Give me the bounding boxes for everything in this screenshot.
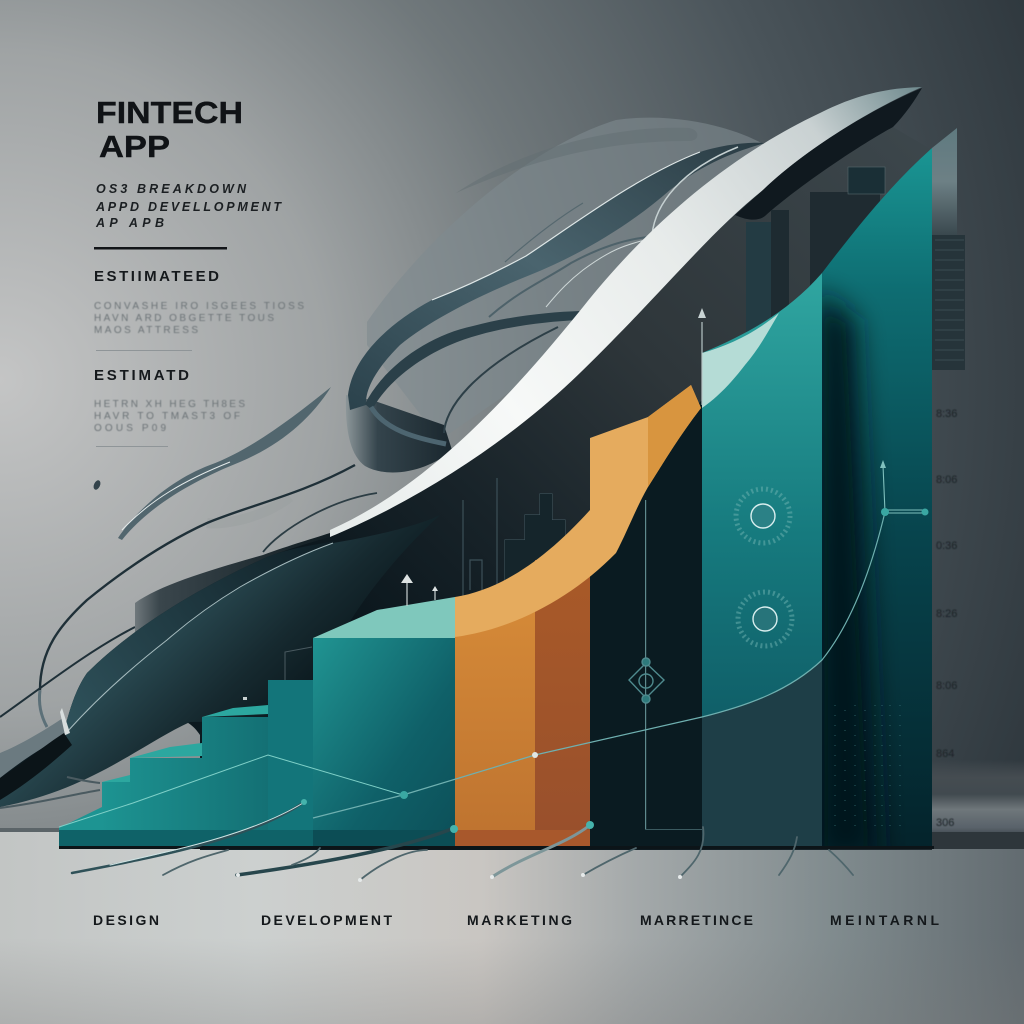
section two: OOUS P09 bbox=[94, 423, 166, 434]
category labels: MEINTARNL bbox=[830, 912, 939, 928]
category labels: MARRETINCE bbox=[640, 912, 753, 928]
grey hump bbox=[135, 532, 337, 640]
dark column bbox=[590, 400, 702, 847]
dark swoosh body bbox=[0, 88, 932, 850]
crescent under ribbon bbox=[735, 88, 922, 220]
left flowing lines bbox=[0, 387, 377, 727]
axis labels: 0:36 bbox=[936, 540, 957, 552]
left swoosh tail bbox=[0, 708, 100, 808]
floor shadow bbox=[59, 846, 934, 849]
right wall band bbox=[930, 760, 1024, 850]
swoosh blade bbox=[65, 541, 335, 732]
section two bbox=[94, 367, 245, 447]
section two: HAVR TO TMAST3 OF bbox=[94, 411, 240, 422]
section one bbox=[94, 268, 304, 351]
hatched block bbox=[932, 235, 965, 370]
title: FINTECH bbox=[96, 95, 243, 130]
floor bbox=[0, 828, 1024, 1024]
cylinder bbox=[346, 395, 452, 473]
teal block bbox=[313, 597, 455, 847]
category labels: DESIGN bbox=[93, 912, 159, 928]
teal steps bbox=[59, 680, 313, 848]
divider bbox=[94, 247, 227, 250]
section one: HAVN ARD OBGETTE TOUS bbox=[94, 313, 274, 324]
section one: MAOS ATTRESS bbox=[94, 325, 198, 336]
skyline lower bbox=[463, 478, 580, 600]
title bbox=[96, 95, 243, 164]
axis labels: 8:06 bbox=[936, 474, 957, 486]
axis labels: 864 bbox=[936, 748, 954, 760]
icon: diamond marker bbox=[629, 658, 664, 703]
axis labels: 8:06 bbox=[936, 680, 957, 692]
axis labels: 8:36 bbox=[936, 408, 957, 420]
axis labels: 8:26 bbox=[936, 608, 957, 620]
section two: ESTIMATD bbox=[94, 367, 189, 384]
stacked chart bbox=[59, 128, 957, 860]
category labels: MARKETING bbox=[467, 912, 572, 928]
subtitle: OS3 BREAKDOWN bbox=[96, 182, 247, 196]
dark teal right column bbox=[815, 128, 957, 860]
orange column bbox=[455, 385, 701, 847]
teal tall column bbox=[702, 273, 822, 848]
axis labels bbox=[936, 408, 957, 829]
section one: ESTIIMATEED bbox=[94, 268, 219, 285]
section one: CONVASHE IRO ISGEES TIOSS bbox=[94, 301, 304, 312]
subtitle bbox=[95, 182, 282, 230]
trend line bbox=[59, 308, 928, 827]
section two: HETRN XH HEG TH8ES bbox=[94, 399, 245, 410]
skyline upper bbox=[746, 167, 885, 334]
category labels bbox=[93, 912, 939, 928]
title: APP bbox=[99, 129, 170, 164]
swirl strands bbox=[348, 143, 765, 444]
subtitle: AP APB bbox=[95, 216, 164, 230]
subtitle: APPD DEVELLOPMENT bbox=[95, 200, 282, 214]
swoosh underside bbox=[0, 515, 440, 807]
background arc bbox=[367, 118, 765, 440]
white ribbon bbox=[330, 87, 922, 537]
axis labels: 306 bbox=[936, 817, 954, 829]
icon: seal lower bbox=[738, 592, 792, 646]
category labels: DEVELOPMENT bbox=[261, 912, 392, 928]
pointer sticks bbox=[72, 799, 853, 882]
dot pattern bbox=[835, 705, 900, 830]
icon: seal upper bbox=[736, 489, 790, 543]
